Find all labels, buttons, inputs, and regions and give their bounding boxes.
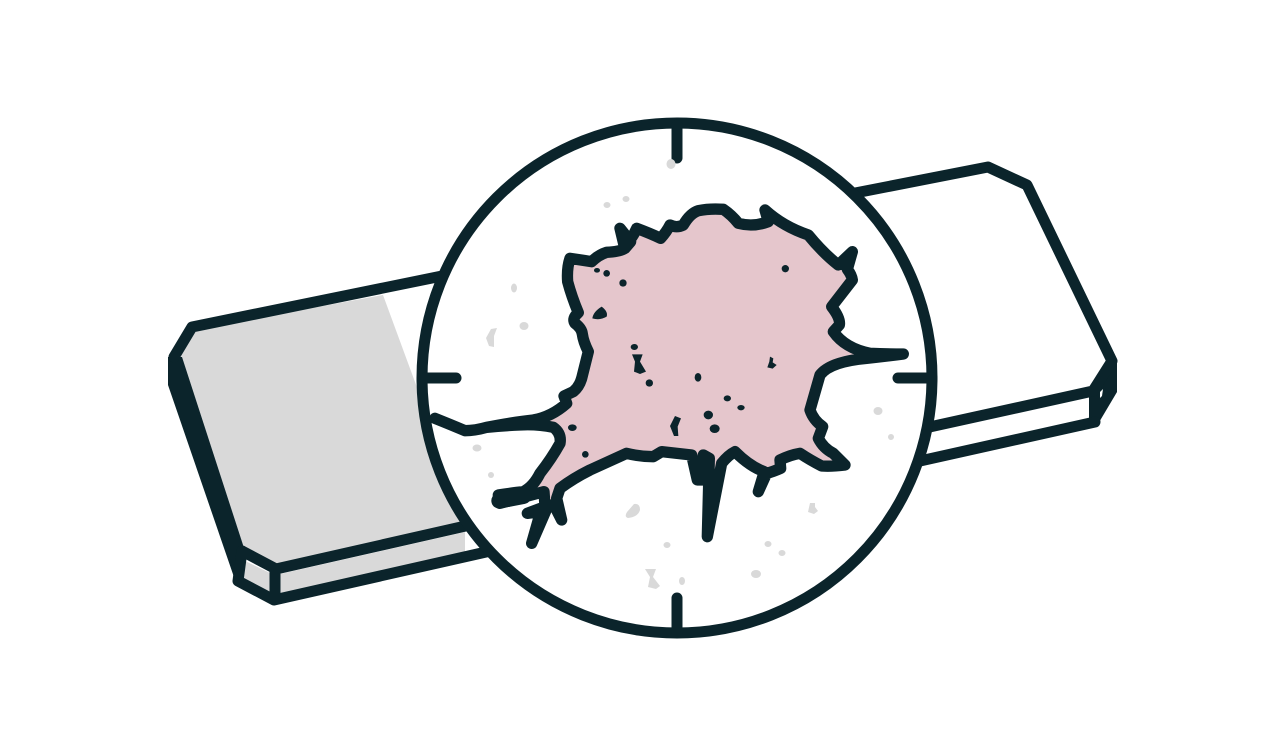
grey worn face bbox=[176, 295, 470, 570]
grey specks around the residue bbox=[472, 159, 894, 589]
dark corner wedge bbox=[1089, 358, 1117, 424]
blob fill and outline bbox=[435, 209, 903, 543]
eraser: left end, worn grey bbox=[168, 276, 495, 600]
eraser: right end, clean white bbox=[850, 167, 1117, 461]
residue blob bbox=[435, 209, 903, 543]
small highlight in the wedge bbox=[1100, 389, 1103, 398]
eraser outline bbox=[174, 276, 495, 600]
eraser outline bbox=[850, 167, 1112, 461]
thick dark left edge bbox=[168, 357, 244, 583]
loupe circle bbox=[422, 123, 932, 633]
thick tip at lower left bbox=[499, 496, 523, 501]
inner dark flecks bbox=[568, 265, 789, 458]
grey side strip bbox=[243, 560, 270, 592]
loupe crosshair ticks bbox=[425, 125, 932, 632]
